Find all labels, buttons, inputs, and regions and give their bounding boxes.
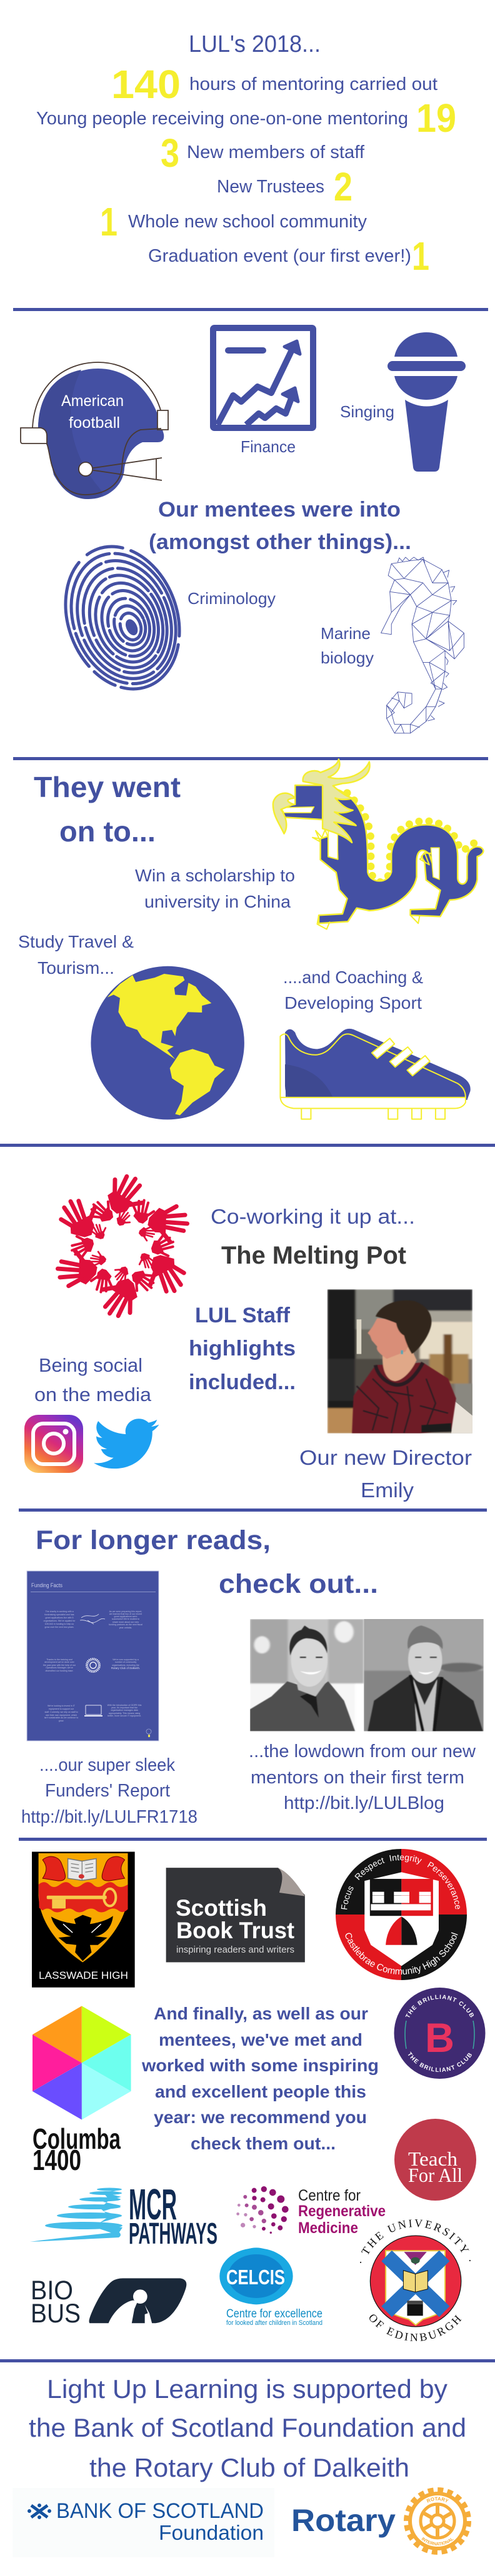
logo: Teach For All: For All	[408, 2164, 462, 2186]
stat: 1 graduation: 1	[412, 234, 429, 279]
logo: Scottish Book Trust	[166, 1867, 306, 1962]
text: Emily: Emily	[361, 1479, 414, 1502]
label: biology: biology	[321, 648, 374, 667]
heading: Our mentees were into: Our mentees were into	[158, 498, 401, 522]
image: funders report page: Operations Manager, we've	[46, 1667, 73, 1669]
logo: University of Edinburgh	[360, 2219, 471, 2341]
icon: instagram	[24, 1415, 83, 1473]
image: funders report page: year, it's important that the	[111, 1707, 138, 1709]
stat label: hours of mentoring: hours of mentoring carried out	[189, 74, 438, 94]
text: for looked after children: for looked after children in Scotland	[226, 2319, 322, 2327]
text: Being social: Being social	[39, 1354, 142, 1376]
heading: on to: on to...	[59, 815, 156, 848]
text: And finally paragraph: mentees, we've met and	[159, 2030, 362, 2049]
logo: Castlebrae Community High School	[336, 1849, 467, 1980]
logo: Castlebrae Community High School: Focus	[341, 1886, 354, 1910]
image: funders report page: funding partners as the next fiscal	[109, 1623, 142, 1626]
text: 1400: 1400	[32, 2144, 81, 2176]
image: funders report page: With the introduction of GDPR this	[108, 1704, 142, 1707]
icon: football boot	[280, 1029, 471, 1119]
panel: supporters	[28, 2374, 471, 2555]
panel: LUL's 2018 statistics	[36, 31, 456, 279]
logo: Rotary	[291, 2487, 471, 2555]
heading: For longer reads: For longer reads,	[36, 1525, 271, 1555]
image: funders report page: organisations, including the	[112, 1664, 139, 1667]
image: funders report page: £39,543 in funding to help us	[45, 1623, 74, 1625]
heading: check out: check out...	[219, 1569, 378, 1599]
logo: Castlebrae Community High School: Respect	[354, 1858, 385, 1880]
logo: Teach For All	[394, 2119, 476, 2201]
logo: Teach For All: Teach	[408, 2147, 458, 2170]
stat label: young people: Young people receiving one-on-one mentoring	[36, 109, 408, 129]
image: funders report page: use their own equipment, which	[46, 1714, 77, 1717]
text: PATHWAYS: PATHWAYS	[129, 2217, 218, 2251]
text: our super sleek: ....our super sleek	[39, 1755, 175, 1775]
heading: LUL Staff: LUL Staff	[195, 1304, 291, 1327]
image: funders report page: successful! We're excited to	[112, 1618, 139, 1620]
text: And finally paragraph	[141, 2004, 379, 2153]
label: American: American	[61, 392, 124, 410]
image: funders report page: organisation manages data	[111, 1709, 138, 1712]
text: Book Trust: Book Trust	[176, 1918, 294, 1943]
panel: mentee interests	[21, 328, 466, 733]
logo: The Brilliant Club	[394, 1988, 485, 2079]
logo: Castlebrae Community High School: Castlebrae Community High School	[345, 1932, 458, 1975]
text: tagline: inspiring readers and writers	[176, 1944, 294, 1955]
heading: included: included...	[189, 1370, 296, 1394]
text: Foundation: Foundation	[159, 2521, 264, 2544]
text: Lasswade High: LASSWADE HIGH	[39, 1969, 128, 1981]
icon: rotary wheel: ROTARY	[426, 2497, 449, 2503]
icon: twitter	[94, 1419, 159, 1469]
logo: University of Edinburgh: · THE UNIVERSITY ·	[360, 2219, 471, 2263]
icon: chinese dragon	[273, 760, 483, 929]
image: funders report page: staff. Currently, we rely on staff to	[44, 1711, 78, 1713]
text: Bank of Scotland Foundation: the Bank of Scotland Foundation and	[29, 2413, 466, 2442]
stat label: new trustees: New Trustees	[217, 177, 324, 197]
label: Marine: Marine	[321, 624, 371, 643]
image: funders report page: grow over the next two years.	[45, 1626, 74, 1628]
heading: highlights: highlights	[189, 1337, 296, 1360]
panel: longer reads	[21, 1525, 484, 1827]
stat: 19: 19	[416, 96, 456, 141]
text: And finally paragraph: year: we recommend you	[154, 2108, 367, 2127]
logo: Bio Bus	[31, 2276, 186, 2329]
text: university in China: university in China	[144, 892, 291, 911]
stat label: school community: Whole new school community	[128, 212, 367, 232]
icon: geometric seahorse	[381, 557, 464, 733]
text: Centre for excellence: Centre for excellence	[226, 2307, 322, 2321]
icon: finance chart	[213, 328, 313, 428]
label: Finance: Finance	[241, 437, 296, 456]
text: Centre for: Centre for	[298, 2187, 361, 2204]
stat: 3: 3	[161, 131, 179, 176]
text: Our new Director: Our new Director	[299, 1446, 472, 1469]
text: Win a scholarship: Win a scholarship to	[135, 866, 295, 885]
text: Coaching: ....and Coaching &	[283, 968, 423, 987]
text: Medicine: Medicine	[298, 2219, 358, 2237]
image: funders report page: grant applications were	[114, 1615, 137, 1618]
text: Rotary Club of Dalkeith: the Rotary Club of Dalkeith	[89, 2453, 409, 2482]
stat: 1 school: 1	[100, 199, 118, 244]
icon: fingerprint	[46, 530, 199, 705]
image: funders report page: number of community	[115, 1661, 136, 1663]
stat label: graduation: Graduation event (our first ever!)	[148, 246, 411, 266]
image: funders report page: We're looking to invest in IT	[48, 1705, 76, 1707]
icon: rotary wheel: INTERNATIONAL	[421, 2537, 454, 2545]
logo: MCR Pathways: MCR	[129, 2180, 177, 2229]
icon: rotary wheel	[404, 2487, 471, 2555]
logo: The Brilliant Club: THE BRILLIANT CLUB	[405, 1995, 474, 2018]
image: funders report page: isn't sustainable as we continue to	[44, 1717, 78, 1719]
panel: partners	[30, 1849, 485, 2341]
image: funders report page: fundraising specialist and has	[44, 1613, 74, 1616]
label: Criminology: Criminology	[188, 589, 276, 608]
text: And finally paragraph: check them out...	[191, 2134, 336, 2153]
stat label: new staff: New members of staff	[187, 142, 365, 162]
image: funders report page: year unfolds.	[119, 1627, 132, 1629]
image: funders report page: appropriately. This means using	[109, 1712, 140, 1715]
image: funders report page: share more about our new	[112, 1621, 139, 1623]
logo: melting pot hands	[39, 1170, 206, 1322]
logo: The Brilliant Club: B	[425, 2014, 454, 2061]
text: BANK OF SCOTLAND: BANK OF SCOTLAND	[56, 2499, 264, 2523]
photo: new mentor woman	[364, 1619, 484, 1731]
logo: CELCIS	[219, 2247, 322, 2327]
image: funders report page: Thanks to the training and	[46, 1658, 72, 1661]
image: funders report page: grow.	[59, 1720, 64, 1722]
logo: Centre for Regenerative Medicine	[236, 2186, 386, 2237]
text: Developing Sport: Developing Sport	[284, 993, 422, 1013]
text: Light Up Learning: Light Up Learning is supported by	[47, 2374, 448, 2404]
logo: Bank of Scotland Foundation	[12, 2488, 274, 2557]
image: funders report page: the past year with the help of our	[43, 1664, 76, 1667]
text: report link: http://bit.ly/LULFR1718	[21, 1807, 198, 1827]
image: funders report page: we learned that two of our recent	[109, 1613, 142, 1615]
text: the lowdown: ...the lowdown from our new	[249, 1741, 476, 1761]
logo: Columba 1400	[32, 2006, 131, 2176]
logo: Castlebrae Community High School: Integrity	[389, 1855, 422, 1865]
image: funders report page: equipment to support our	[49, 1708, 74, 1710]
heading: LUL's 2018: LUL's 2018...	[189, 31, 321, 57]
text: on the media: on the media	[34, 1384, 152, 1405]
stat: 140: 140	[111, 62, 181, 107]
text: And finally paragraph: And finally, as well as our	[154, 2004, 368, 2023]
heading: amongst other things: (amongst other things)...	[149, 530, 411, 554]
photo: Emily	[328, 1289, 474, 1434]
text: Columba: Columba	[32, 2123, 121, 2155]
text: Scottish: Scottish	[176, 1895, 267, 1921]
logo: University of Edinburgh: OF EDINBURGH	[369, 2314, 462, 2341]
text: blog link: http://bit.ly/LULBlog	[284, 1793, 444, 1813]
logo: Lasswade High	[32, 1851, 135, 1988]
text: mentors first term: mentors on their first term	[251, 1768, 464, 1788]
image: funders report page: As we were preparing this report,	[109, 1610, 142, 1613]
text: Study Travel: Study Travel &	[18, 932, 134, 951]
image: funders report page: Funding Facts	[31, 1582, 62, 1588]
image: funders report page	[27, 1571, 159, 1741]
logo: CELCIS: CELCIS	[226, 2266, 285, 2289]
image: funders report page: diversified our funding base.	[46, 1670, 73, 1672]
image: funders report page: better, more secure IT equipment.	[108, 1715, 141, 1717]
label: Singing: Singing	[340, 402, 394, 421]
image: funders report page: The charity is working with a	[45, 1610, 74, 1613]
panel: They went on to	[18, 760, 483, 1119]
image: funders report page: Rotary Club of Dalkeith.	[111, 1667, 140, 1670]
logo: MCR Pathways	[30, 2180, 218, 2251]
text: And finally paragraph: and excellent people this	[155, 2082, 366, 2101]
photo: new mentor man	[250, 1619, 364, 1731]
text: Regenerative: Regenerative	[298, 2202, 386, 2220]
text: Co-working: Co-working it up at...	[211, 1205, 415, 1228]
image: funders report page: grant applications live with 5	[46, 1617, 73, 1619]
logo: Bio Bus: BIO	[31, 2276, 73, 2306]
image: funders report page: We're now supported by a	[112, 1658, 139, 1661]
text: And finally paragraph: worked with some inspiring	[141, 2056, 379, 2075]
stat: 2: 2	[334, 164, 352, 209]
panel: co-working and staff	[24, 1170, 474, 1502]
logo: The Brilliant Club: THE BRILLIANT CLUB	[408, 2051, 472, 2072]
label: football: football	[69, 414, 120, 432]
logo: Rotary: Rotary	[291, 2503, 396, 2538]
icon: globe	[91, 966, 244, 1119]
image: funders report page: organisations. We've applied for	[44, 1620, 76, 1622]
logo: Bio Bus: BUS	[31, 2299, 81, 2329]
text: Funders Report: Funders' Report	[45, 1781, 170, 1801]
icon: american football helmet	[21, 362, 168, 499]
text: The Melting Pot: The Melting Pot	[221, 1242, 406, 1269]
image: funders report page: development we've done over	[44, 1661, 75, 1663]
text: Tourism: Tourism...	[38, 958, 114, 978]
logo: Castlebrae Community High School: Perseverance	[428, 1861, 460, 1909]
heading: They went: They went	[34, 771, 181, 803]
icon: microphone	[388, 332, 466, 472]
